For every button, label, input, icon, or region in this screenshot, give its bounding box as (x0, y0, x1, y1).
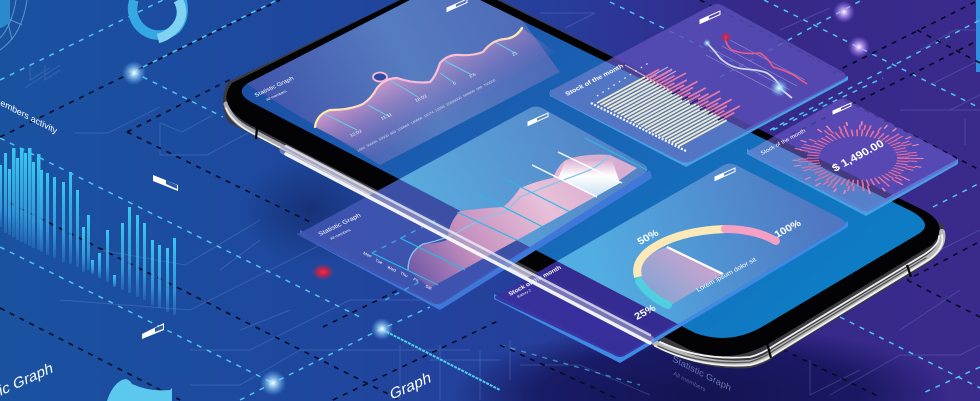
cyan lines (372, 138, 647, 285)
donut chart (133, 0, 183, 38)
panel body (297, 106, 647, 304)
glow marks (721, 32, 731, 42)
panel: stock of the month bars (549, 4, 848, 167)
drop lines (323, 42, 515, 130)
subtitle: All members (265, 89, 288, 102)
panel: sunburst value (747, 98, 958, 216)
dashed line cyan bright (383, 330, 500, 390)
phone screen (242, 0, 925, 338)
title: Statistic Graph (317, 212, 363, 238)
value labels: 1:6 (468, 72, 477, 79)
value labels: 21 (511, 50, 519, 57)
axis labels: 1000 5000% 50000 900 100000 140000 15574 12256 20000000 500000 500 750000 (356, 79, 496, 153)
title: Statistic Graph (254, 76, 295, 99)
gauge arc teal (639, 281, 668, 305)
blob chart (107, 379, 172, 401)
glow: panel node (770, 79, 788, 97)
subtitle: All members (329, 228, 352, 241)
panel body (495, 164, 845, 357)
screen tint (556, 164, 845, 324)
icon: toggle (700, 11, 720, 24)
glow: center node (371, 318, 393, 340)
pink bars (645, 70, 740, 119)
white line (707, 43, 792, 98)
area under line (315, 28, 555, 157)
panel body (748, 98, 956, 212)
value labels: 11:11 (380, 112, 393, 121)
panel: gauge (494, 164, 848, 363)
glow: white line start (703, 39, 711, 47)
panel: top line graph (240, 0, 560, 165)
dark dashes (372, 220, 490, 300)
phone joints (256, 127, 911, 358)
white highlight (558, 160, 620, 197)
glow: upper left node (122, 61, 146, 85)
phone steel highlight lines (226, 104, 942, 366)
label 25: 25% (633, 303, 658, 322)
glow: top right node two (848, 36, 870, 58)
bar chart (0, 148, 176, 315)
screen tint (748, 140, 888, 212)
label 50: 50% (636, 228, 661, 247)
icon: toggle (528, 113, 548, 126)
radial chart fragment (0, 0, 27, 50)
panel body (549, 4, 846, 162)
day labels (363, 251, 433, 291)
pink line (725, 37, 807, 84)
screen tint (549, 62, 748, 162)
ghost text: all members: All members (673, 370, 706, 393)
day labels: Sat (425, 284, 433, 291)
glow: bottom node (260, 370, 286, 396)
grid lines (706, 40, 805, 95)
label 100: 100% (773, 218, 803, 240)
panel edge (550, 76, 848, 167)
needle (667, 247, 723, 274)
panel edge (494, 221, 848, 363)
phone (223, 0, 945, 368)
day labels: Fri (413, 277, 419, 283)
screen tint (399, 106, 648, 247)
gauge fill (638, 247, 723, 305)
top right blue panel edge (976, 0, 980, 72)
area (408, 155, 637, 288)
icon: toggle left upper (153, 175, 178, 191)
panel: middle area graph (297, 106, 652, 310)
value labels: 12:02 (349, 129, 363, 138)
line (315, 28, 522, 127)
day labels: Tue (375, 258, 384, 265)
ghost text: statistic graph: Statistic Graph (672, 353, 732, 393)
value labels: 0 (452, 81, 457, 86)
day labels: Mon (363, 251, 373, 259)
dot rows (591, 103, 686, 151)
glow: top right node one (833, 1, 855, 23)
subtitle: Battery 2 (516, 288, 532, 299)
sunburst ticks (796, 123, 920, 193)
dark bar marks (672, 90, 724, 120)
value: $ 1,490.00 (830, 138, 886, 174)
panel edge (300, 170, 652, 310)
day labels: Wed (387, 265, 397, 273)
title: Stock of the month (507, 264, 563, 298)
title: Stock of the month (564, 63, 625, 97)
cream bars (597, 77, 727, 146)
heading: members activity: embers activity (0, 98, 58, 136)
caption: Lorem ipsum dolor sit (695, 257, 758, 294)
marker (373, 72, 387, 82)
phone bezel (226, 0, 940, 356)
icon: toggle left lower (142, 323, 164, 339)
white lines (532, 152, 622, 197)
icon: toggle (715, 168, 735, 180)
gauge arc pink (725, 229, 776, 241)
icon: toggle (447, 0, 467, 12)
glow: red node (312, 264, 334, 280)
panel edge (747, 149, 958, 216)
value labels (349, 50, 519, 138)
gauge arc cream (637, 229, 725, 277)
icon: toggle (833, 103, 851, 114)
front curve (408, 155, 610, 270)
phone side reflection (284, 146, 650, 343)
value labels: 18:02 (414, 94, 428, 103)
phone steel frame (223, 0, 945, 368)
day labels: Thu (400, 271, 409, 278)
title: Stock of the month (760, 128, 807, 157)
